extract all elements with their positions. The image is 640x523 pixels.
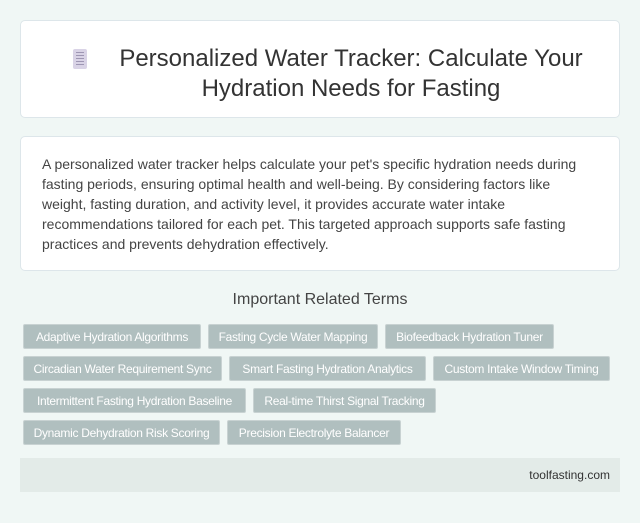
- tags: Dynamic Dehydration Risk Scoring: [34, 426, 209, 440]
- header panel: [20, 20, 620, 118]
- tags: Circadian Water Requirement Sync: [33, 362, 212, 376]
- tags: Smart Fasting Hydration Analytics: [242, 362, 413, 376]
- section heading: Important Related Terms: [233, 291, 407, 308]
- footer: [20, 458, 620, 492]
- description text: A personalized water tracker helps calculate your pet's specific hydration needs during fasting periods, ensuring optimal health and well-being. By considering factors like weight, fasting duration, and activity level, it provides accurate water intake recommendations tailored for each pet. This targeted approach supports safe fasting practices and prevents dehydration effectively.: [42, 156, 576, 252]
- tags: Real-time Thirst Signal Tracking: [264, 394, 425, 408]
- title: Personalized Water Tracker: Calculate Your Hydration Needs for Fasting: [119, 45, 583, 102]
- icon: document: [73, 49, 87, 69]
- tags: Precision Electrolyte Balancer: [239, 426, 389, 440]
- tags: Custom Intake Window Timing: [445, 362, 598, 376]
- tags: Intermittent Fasting Hydration Baseline: [37, 394, 232, 408]
- footer text: toolfasting.com: [529, 468, 610, 482]
- tags: Adaptive Hydration Algorithms: [36, 330, 188, 344]
- tags: Biofeedback Hydration Tuner: [396, 330, 543, 344]
- tags: Fasting Cycle Water Mapping: [219, 330, 367, 344]
- description panel: [20, 136, 620, 271]
